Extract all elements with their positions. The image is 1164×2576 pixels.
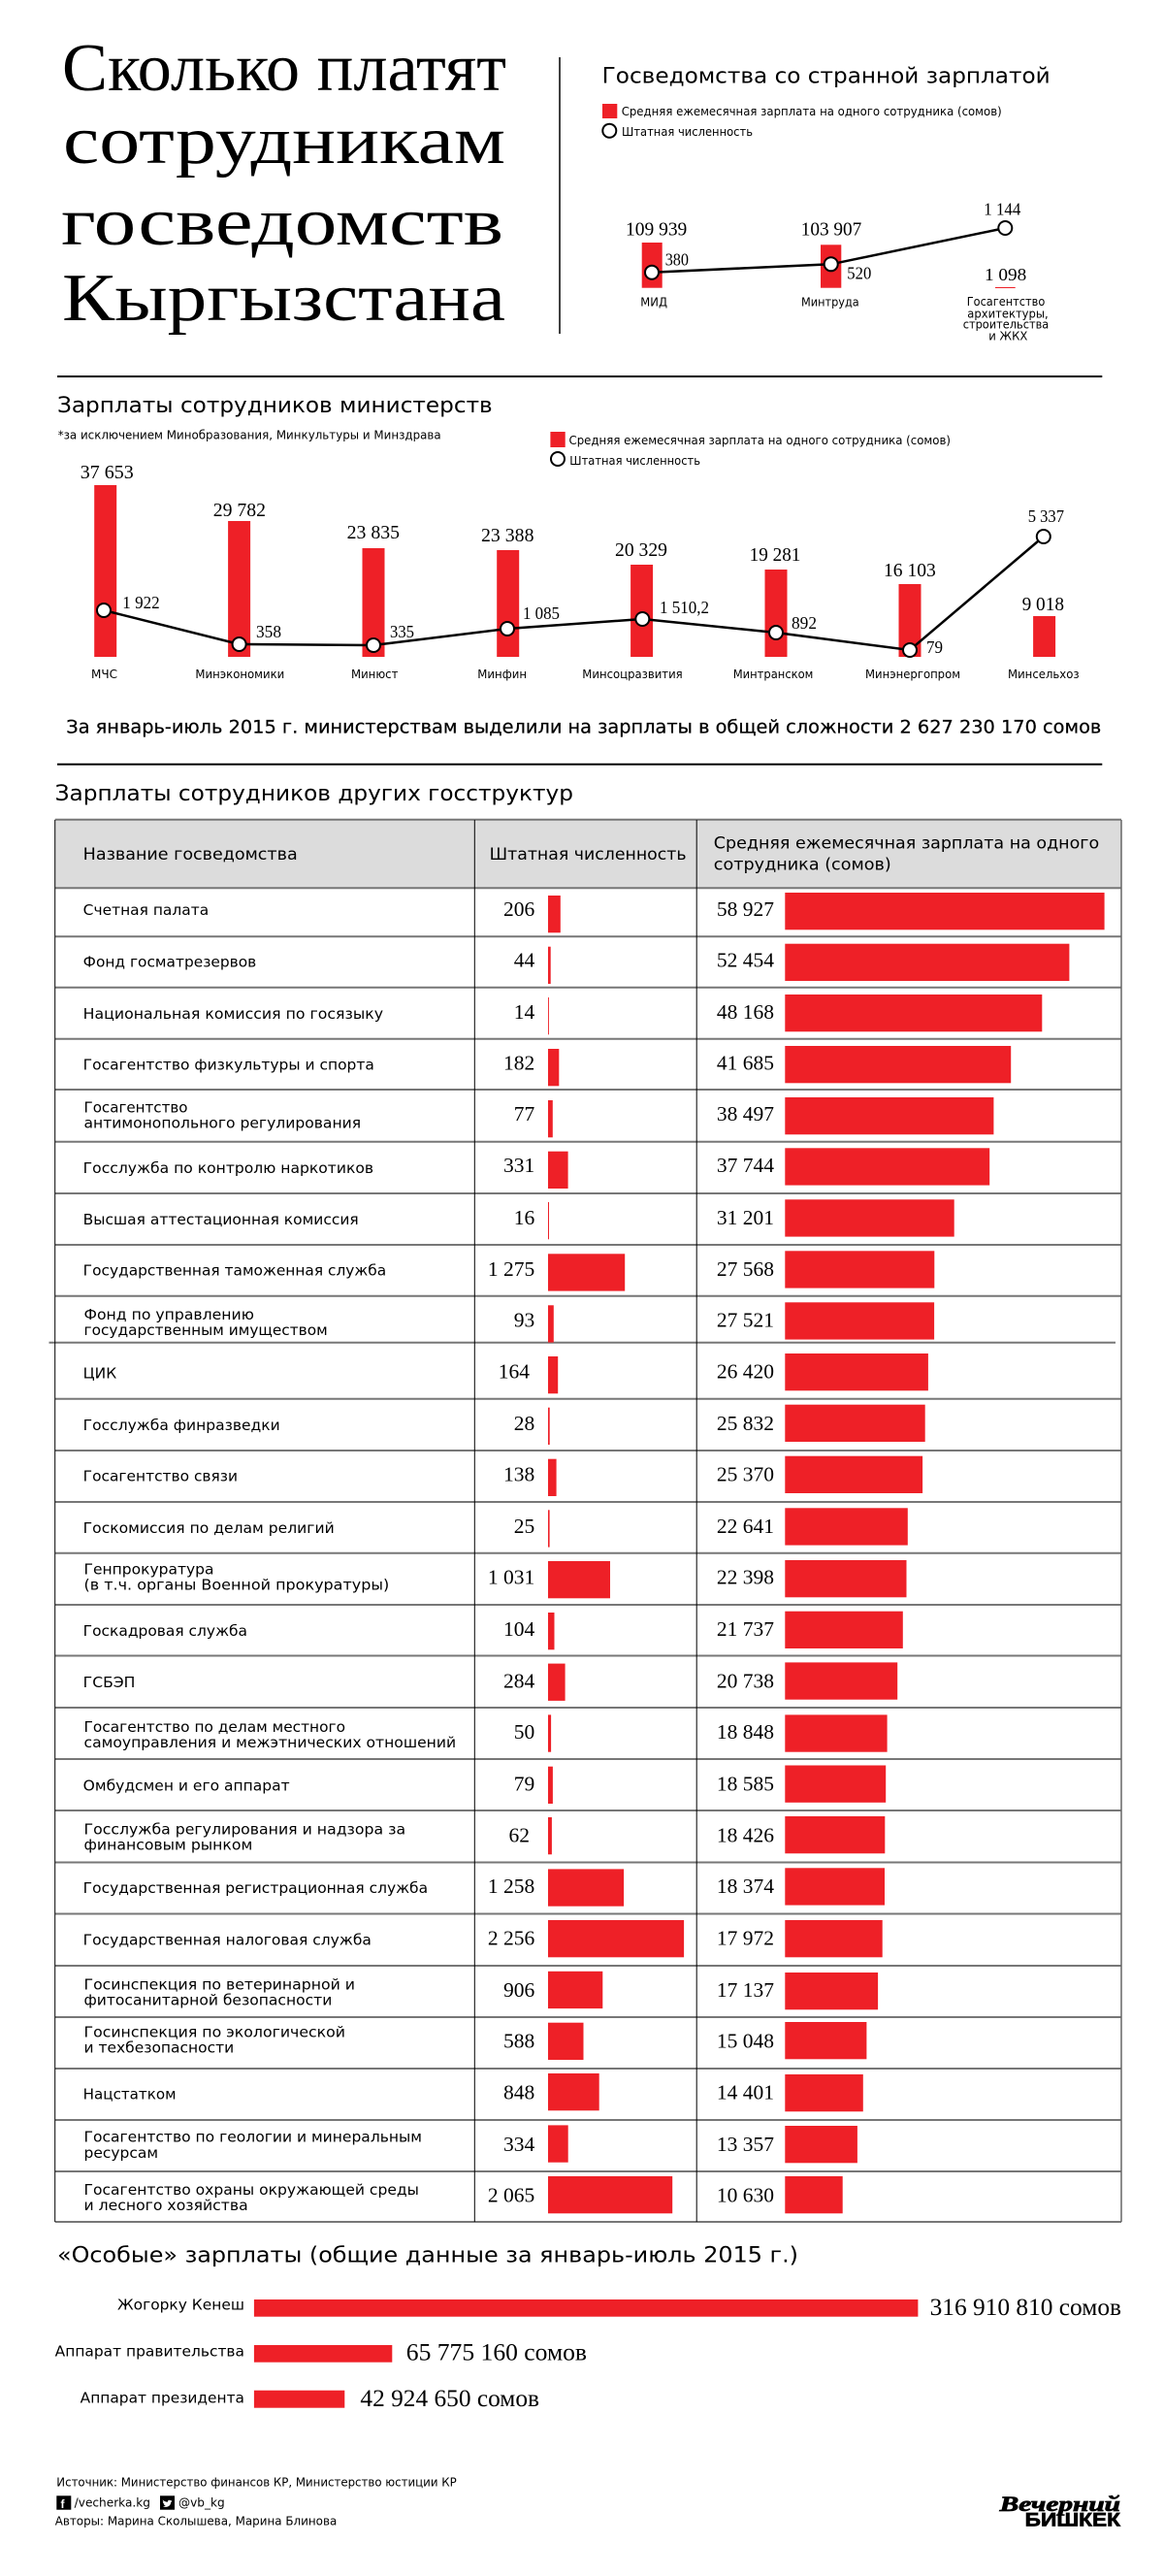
table header: сотрудника (сомов) bbox=[714, 856, 891, 874]
bar: Жогорку Кенеш: Жогорку Кенеш bbox=[117, 2297, 244, 2314]
bar: Аппарат правительства: Аппарат правительства bbox=[55, 2343, 244, 2361]
row: Государственная регистрационная служба bbox=[83, 1868, 885, 1907]
icon: twitter bbox=[160, 2495, 175, 2510]
row: Госслужба по контролю наркотиков bbox=[83, 1148, 989, 1189]
row: Государственная таможенная служба: 27 568 bbox=[717, 1257, 774, 1281]
row: Госкомиссия по делам религий bbox=[83, 1508, 908, 1548]
row: Высшая аттестационная комиссия: Высшая аттестационная комиссия bbox=[83, 1211, 359, 1228]
title: сотрудникам bbox=[63, 104, 505, 179]
bar and line chart: ministries: Минсельхоз bbox=[1008, 668, 1080, 681]
table header bbox=[55, 820, 1121, 888]
row: Высшая аттестационная комиссия: 16 bbox=[514, 1206, 535, 1229]
title bbox=[61, 31, 506, 336]
bar and line chart: ministries: Минсоцразвития bbox=[582, 668, 683, 681]
bar and line chart: ministries: 19 281 bbox=[750, 544, 800, 566]
row: Госинспекция по ветеринарной и фитосанитарной безопасности: Госинспекция по ветеринарной и bbox=[83, 1976, 355, 1994]
row: Национальная комиссия по госязыку bbox=[83, 995, 1042, 1034]
table header: Средняя ежемесячная зарплата на одного bbox=[714, 834, 1099, 853]
bar: Аппарат правительства: 65 775 160 сомов bbox=[406, 2340, 587, 2366]
row: Счетная палата: Счетная палата bbox=[83, 901, 209, 919]
row: ГСБЭП: 20 738 bbox=[717, 1669, 774, 1692]
panel: special salaries bbox=[55, 2243, 1121, 2412]
row: Фонд по управлению государственным имуществом: 93 bbox=[514, 1309, 534, 1332]
bar and line chart: ministries: МЧС bbox=[91, 668, 117, 681]
bar and line chart: ministries: 1 085 bbox=[523, 603, 560, 623]
row: Генпрокуратура bbox=[83, 1560, 906, 1598]
row: ЦИК: ЦИК bbox=[83, 1365, 117, 1383]
row: Госагентство по делам местного самоуправления: 50 bbox=[514, 1720, 534, 1744]
row: Госслужба финразведки: 28 bbox=[514, 1412, 534, 1435]
bar: Жогорку Кенеш bbox=[117, 2295, 1121, 2321]
chart: agencies bbox=[626, 199, 1049, 343]
row: Госагентство по геологии и минеральным ресурсам: ресурсам bbox=[83, 2144, 158, 2162]
bar and line chart: ministries: 37 653 bbox=[81, 462, 134, 483]
icon: facebook bbox=[56, 2495, 71, 2511]
logo: Вечерний Бишкек: Вечерний bbox=[998, 2492, 1120, 2516]
row: Госагентство физкультуры и спорта: 41 685 bbox=[717, 1052, 774, 1075]
row: Госинспекция по ветеринарной и фитосанитарной безопасности: фитосанитарной безопасности bbox=[83, 1992, 332, 2009]
row: Национальная комиссия по госязыку: Национальная комиссия по госязыку bbox=[83, 1005, 383, 1023]
row: Госагентство физкультуры и спорта: Госагентство физкультуры и спорта bbox=[83, 1057, 374, 1074]
row: Госагентство по геологии и минеральным ресурсам bbox=[83, 2125, 857, 2163]
row: Государственная регистрационная служба: 1 258 bbox=[488, 1875, 534, 1898]
row: Государственная налоговая служба: 2 256 bbox=[488, 1927, 535, 1950]
chart: agencies: 1 098 bbox=[985, 265, 1027, 284]
row: Фонд по управлению государственным имуществом bbox=[83, 1302, 934, 1343]
row: Госслужба по контролю наркотиков: Госслужба по контролю наркотиков bbox=[83, 1159, 373, 1177]
table header: Название госведомства bbox=[83, 845, 298, 864]
row: ГСБЭП: 284 bbox=[503, 1669, 535, 1692]
chart: agencies: 109 939 bbox=[626, 220, 687, 241]
row: Госслужба регулирования и надзора за финансовым рынком: 18 426 bbox=[717, 1824, 774, 1847]
row: Госагентство охраны окружающей среды и лесного хозяйства: 2 065 bbox=[488, 2184, 534, 2207]
row: Госагентство физкультуры и спорта: 182 bbox=[503, 1052, 534, 1075]
bar and line chart: ministries: 9 018 bbox=[1022, 594, 1064, 615]
logo: Вечерний Бишкек: БИШКЕК bbox=[1025, 2509, 1120, 2530]
row: Счетная палата bbox=[83, 893, 1105, 932]
row: Госагентство антимонопольного регулирования bbox=[83, 1097, 993, 1137]
chart: agencies: 1 144 bbox=[984, 199, 1021, 218]
bar: Жогорку Кенеш: 316 910 810 сомов bbox=[930, 2295, 1121, 2321]
row: Государственная регистрационная служба: Государственная регистрационная служба bbox=[83, 1879, 428, 1897]
panel: ministry salaries bbox=[57, 393, 1101, 738]
row: Фонд госматрезервов: 52 454 bbox=[717, 949, 774, 972]
legend: Средняя ежемесячная зарплата на одного сотрудника (сомов) bbox=[622, 105, 1002, 118]
row: Госагентство охраны окружающей среды и лесного хозяйства bbox=[83, 2176, 843, 2214]
row: Омбудсмен и его аппарат: 79 bbox=[514, 1773, 534, 1796]
row: Госагентство антимонопольного регулирования: 38 497 bbox=[717, 1102, 774, 1125]
chart: agencies: строительства bbox=[963, 318, 1049, 332]
row: Госагентство по делам местного самоуправления: Госагентство по делам местного bbox=[83, 1718, 345, 1736]
row: Счетная палата: 58 927 bbox=[717, 897, 774, 921]
row: Госагентство охраны окружающей среды и лесного хозяйства: Госагентство охраны окружающей среды bbox=[83, 2181, 419, 2199]
row: Госслужба по контролю наркотиков: 37 744 bbox=[717, 1154, 774, 1177]
row: Фонд по управлению государственным имуществом: государственным имуществом bbox=[83, 1321, 328, 1339]
row: Генпрокуратура: (в т.ч. органы Военной прокуратуры) bbox=[83, 1577, 389, 1594]
bar and line chart: ministries: Минфин bbox=[477, 668, 527, 681]
title: госведомств bbox=[61, 185, 503, 260]
row: Госагентство по геологии и минеральным ресурсам: 334 bbox=[503, 2133, 535, 2156]
heading: special salaries: «Особые» зарплаты (общие данные за январь-июль 2015 г.) bbox=[57, 2243, 798, 2268]
row: Госагентство физкультуры и спорта bbox=[83, 1046, 1011, 1086]
row: Госкадровая служба: 104 bbox=[503, 1617, 535, 1641]
bar: Аппарат правительства bbox=[55, 2340, 587, 2366]
bar and line chart: ministries: 358 bbox=[256, 622, 281, 641]
row: ЦИК: 26 420 bbox=[717, 1360, 774, 1384]
row: Госинспекция по экологической и техбезопасности: 15 048 bbox=[717, 2030, 774, 2053]
row: Госагентство охраны окружающей среды и лесного хозяйства: и лесного хозяйства bbox=[83, 2197, 248, 2214]
row: Нацстатком: 848 bbox=[503, 2081, 534, 2104]
legend: Штатная численность bbox=[569, 454, 700, 468]
row: ГСБЭП: ГСБЭП bbox=[83, 1674, 135, 1691]
row: Национальная комиссия по госязыку: 48 168 bbox=[717, 1000, 774, 1024]
bar and line chart: ministries: 23 835 bbox=[347, 522, 400, 543]
bar and line chart: ministries bbox=[81, 462, 1080, 681]
title: Кыргызстана bbox=[62, 261, 505, 336]
row: ЦИК bbox=[83, 1353, 928, 1393]
legend bbox=[602, 104, 1002, 139]
bar and line chart: ministries: 1 922 bbox=[122, 593, 160, 612]
chart: agencies: МИД bbox=[640, 295, 667, 309]
row: Омбудсмен и его аппарат: 18 585 bbox=[717, 1773, 774, 1796]
row: Нацстатком bbox=[83, 2073, 863, 2111]
row: Госинспекция по экологической и техбезопасности: и техбезопасности bbox=[83, 2039, 234, 2057]
row: Генпрокуратура: Генпрокуратура bbox=[83, 1561, 213, 1579]
row: Госслужба финразведки: 25 832 bbox=[717, 1412, 774, 1435]
logo: Вечерний Бишкек bbox=[998, 2492, 1120, 2530]
row: ГСБЭП bbox=[83, 1662, 897, 1701]
bar and line chart: ministries: Минэкономики bbox=[195, 668, 284, 681]
heading: agencies with strange salaries: Госведомства со странной зарплатой bbox=[602, 64, 1051, 89]
row: Госагентство антимонопольного регулирования: антимонопольного регулирования bbox=[83, 1115, 361, 1132]
footnote: *за исключением Минобразования, Минкультуры и Минздрава bbox=[58, 429, 441, 442]
bar and line chart: ministries: 335 bbox=[390, 622, 414, 641]
row: Фонд по управлению государственным имуществом: 27 521 bbox=[717, 1309, 774, 1332]
row: Госагентство по геологии и минеральным ресурсам: Госагентство по геологии и минеральным bbox=[83, 2129, 422, 2146]
row: Госагентство связи: 138 bbox=[503, 1463, 534, 1486]
bar and line chart: ministries: Минэнергопром bbox=[865, 668, 960, 681]
row: Национальная комиссия по госязыку: 14 bbox=[514, 1000, 535, 1024]
bar: Аппарат президента bbox=[81, 2386, 539, 2412]
row: Госагентство антимонопольного регулирования: 77 bbox=[514, 1102, 535, 1125]
row: Госагентство связи: Госагентство связи bbox=[83, 1468, 238, 1485]
chart: agencies: 103 907 bbox=[801, 220, 862, 241]
source: Источник: Министерство финансов КР, Министерство юстиции КР bbox=[56, 2475, 457, 2489]
row: Государственная налоговая служба: Государственная налоговая служба bbox=[83, 1932, 372, 1949]
bar: Аппарат президента: 42 924 650 сомов bbox=[360, 2386, 539, 2412]
row: Госинспекция по экологической и техбезопасности bbox=[83, 2022, 866, 2060]
row: Высшая аттестационная комиссия bbox=[83, 1199, 954, 1239]
row: Госагентство связи: 25 370 bbox=[717, 1463, 774, 1486]
footer credits bbox=[55, 2475, 457, 2527]
row: Госкомиссия по делам религий: 22 641 bbox=[717, 1515, 774, 1538]
legend bbox=[550, 432, 951, 468]
row: Госинспекция по ветеринарной и фитосанитарной безопасности bbox=[83, 1972, 878, 2009]
row: Госслужба регулирования и надзора за финансовым рынком: финансовым рынком bbox=[83, 1836, 252, 1853]
row: Омбудсмен и его аппарат: Омбудсмен и его аппарат bbox=[83, 1777, 290, 1795]
facebook handle: /vecherka.kg bbox=[75, 2495, 150, 2509]
title: Сколько платят bbox=[62, 31, 506, 106]
heading: other state bodies: Зарплаты сотрудников других госструктур bbox=[55, 781, 573, 806]
bar and line chart: ministries: 892 bbox=[792, 613, 817, 633]
authors: Авторы: Марина Сколышева, Марина Блинова bbox=[55, 2514, 337, 2527]
row: Госслужба по контролю наркотиков: 331 bbox=[503, 1154, 534, 1177]
row: Госкадровая служба bbox=[83, 1612, 903, 1649]
row: Госагентство связи bbox=[83, 1456, 922, 1496]
bar and line chart: ministries: 16 103 bbox=[884, 560, 936, 581]
bar and line chart: ministries: 20 329 bbox=[615, 539, 667, 561]
row: Госслужба регулирования и надзора за финансовым рынком bbox=[83, 1816, 885, 1854]
row: Госагентство охраны окружающей среды и лесного хозяйства: 10 630 bbox=[717, 2184, 774, 2207]
row: Госинспекция по экологической и техбезопасности: 588 bbox=[503, 2030, 534, 2053]
row: Госинспекция по ветеринарной и фитосанитарной безопасности: 17 137 bbox=[717, 1978, 774, 2002]
row: Государственная таможенная служба: Государственная таможенная служба bbox=[83, 1262, 386, 1280]
row: Госинспекция по экологической и техбезопасности: Госинспекция по экологической bbox=[83, 2024, 345, 2041]
row: Госкомиссия по делам религий: 25 bbox=[514, 1515, 534, 1538]
row: Фонд госматрезервов bbox=[83, 944, 1069, 984]
bar: Аппарат президента: Аппарат президента bbox=[81, 2390, 244, 2407]
bar and line chart: ministries: Минтранском bbox=[733, 668, 813, 681]
bar and line chart: ministries: 29 782 bbox=[213, 500, 266, 521]
chart: agencies: 520 bbox=[847, 263, 872, 282]
row: Госагентство по геологии и минеральным ресурсам: 13 357 bbox=[717, 2133, 774, 2156]
row: Государственная таможенная служба: 1 275 bbox=[488, 1257, 534, 1281]
legend: Штатная численность bbox=[622, 125, 753, 139]
row: Госкадровая служба: 21 737 bbox=[717, 1617, 774, 1641]
row: Госслужба регулирования и надзора за финансовым рынком: 62 bbox=[508, 1824, 530, 1847]
row: Госкомиссия по делам религий: Госкомиссия по делам религий bbox=[83, 1519, 335, 1537]
row: Госагентство по делам местного самоуправления: 18 848 bbox=[717, 1720, 774, 1744]
bar and line chart: ministries: 79 bbox=[926, 637, 943, 657]
row: Нацстатком: 14 401 bbox=[717, 2081, 774, 2104]
row: Фонд госматрезервов: 44 bbox=[514, 949, 535, 972]
table header: Штатная численность bbox=[490, 845, 687, 864]
row: Омбудсмен и его аппарат bbox=[83, 1766, 886, 1804]
row: Госслужба регулирования и надзора за финансовым рынком: Госслужба регулирования и надзора за bbox=[83, 1820, 405, 1838]
row: Счетная палата: 206 bbox=[503, 897, 535, 921]
panel: agencies with strange salaries bbox=[602, 64, 1051, 343]
bar and line chart: ministries: 1 510,2 bbox=[660, 598, 709, 617]
row: Генпрокуратура: 22 398 bbox=[717, 1566, 774, 1589]
row: Госслужба финразведки: Госслужба финразведки bbox=[83, 1417, 280, 1434]
row: Фонд по управлению государственным имуществом: Фонд по управлению bbox=[83, 1306, 254, 1323]
row: Высшая аттестационная комиссия: 31 201 bbox=[717, 1206, 774, 1229]
row: Государственная таможенная служба bbox=[83, 1251, 934, 1291]
row: Фонд госматрезервов: Фонд госматрезервов bbox=[83, 954, 256, 971]
bar and line chart: ministries: 5 337 bbox=[1028, 506, 1064, 526]
chart: agencies: архитектуры, bbox=[967, 307, 1049, 320]
row: Госагентство по делам местного самоуправления: самоуправления и межэтнических отношений bbox=[83, 1734, 456, 1751]
chart: agencies: Госагентство bbox=[967, 295, 1045, 309]
row: Госагентство по делам местного самоуправления bbox=[83, 1714, 888, 1752]
row: Генпрокуратура: 1 031 bbox=[488, 1566, 534, 1589]
row: Государственная налоговая служба bbox=[83, 1920, 883, 1957]
row: Госкадровая служба: Госкадровая служба bbox=[83, 1622, 247, 1640]
icon: facebook: f bbox=[60, 2497, 66, 2511]
chart: agencies: 380 bbox=[665, 249, 689, 269]
row: Госагентство антимонопольного регулирования: Госагентство bbox=[83, 1099, 188, 1117]
chart: agencies: Минтруда bbox=[801, 295, 859, 309]
bar and line chart: ministries: Минюст bbox=[351, 668, 398, 681]
panel: table bbox=[48, 820, 1121, 2222]
row: Государственная регистрационная служба: 18 374 bbox=[717, 1875, 774, 1898]
twitter handle: @vb_kg bbox=[178, 2495, 225, 2509]
row: Нацстатком: Нацстатком bbox=[83, 2086, 177, 2103]
row: Государственная налоговая служба: 17 972 bbox=[717, 1927, 774, 1950]
callout: total: За январь-июль 2015 г. министерствам выделили на зарплаты в общей сложности 2 627 230 170 сомов bbox=[66, 718, 1101, 738]
bar and line chart: ministries: 23 388 bbox=[481, 525, 534, 546]
chart: agencies: и ЖКХ bbox=[988, 330, 1027, 343]
legend: Средняя ежемесячная зарплата на одного сотрудника (сомов) bbox=[568, 434, 951, 447]
row: Госслужба финразведки bbox=[83, 1405, 925, 1445]
heading: ministry salaries: Зарплаты сотрудников министерств bbox=[57, 393, 493, 418]
row: ЦИК: 164 bbox=[499, 1360, 530, 1384]
row: Госинспекция по ветеринарной и фитосанитарной безопасности: 906 bbox=[503, 1978, 535, 2002]
